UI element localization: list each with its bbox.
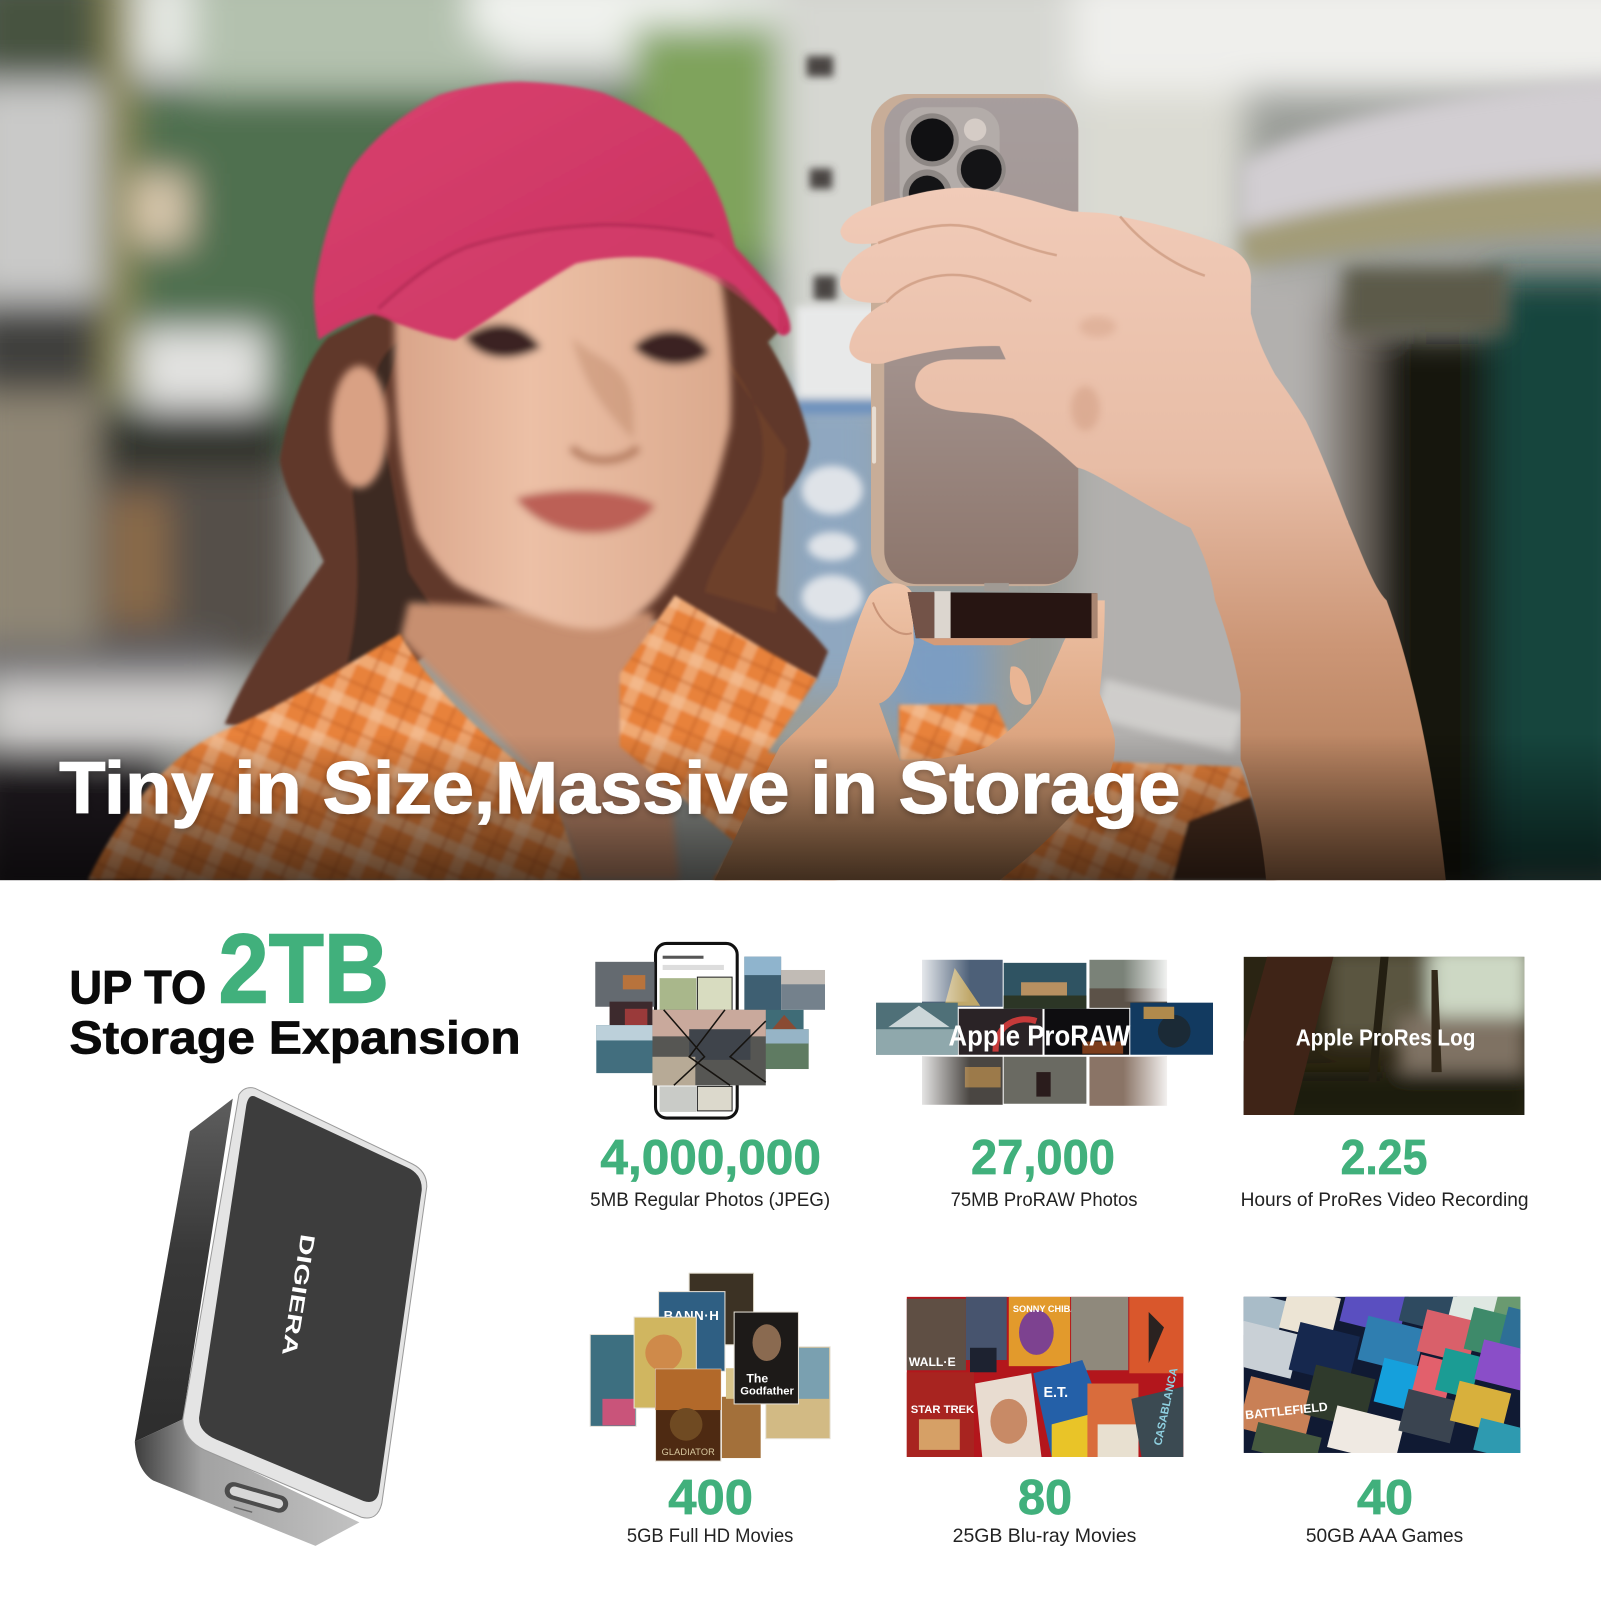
curved photo wall — [876, 955, 1213, 1108]
item: AAA games — [1244, 1296, 1520, 1542]
caption: 5GB Full HD Movies — [627, 1525, 793, 1547]
product: SSD device — [135, 1088, 427, 1546]
logo: DIGIERA — [277, 1233, 318, 1357]
overlay label: Apple ProRAW — [949, 1021, 1130, 1053]
item: JPEG photos — [590, 943, 830, 1211]
heading: capacity: UP TO — [69, 961, 206, 1014]
right sleeve behind arm — [899, 705, 1276, 880]
poster stack: The — [746, 1371, 768, 1385]
upper hand and arm holding phone — [840, 188, 1446, 880]
caption: 25GB Blu-ray Movies — [953, 1525, 1136, 1547]
bottom dark gradient — [0, 735, 1601, 880]
disc cover collage: SONNY CHIBA — [1013, 1304, 1077, 1314]
disc cover collage: CASABLANCA — [1152, 1367, 1181, 1447]
figure: 80 — [1018, 1471, 1072, 1525]
game tile collage — [1244, 1296, 1520, 1453]
heading: capacity: Storage Expansion — [69, 1012, 521, 1064]
blurred street background — [0, 0, 1601, 914]
photo collage with phone — [595, 943, 825, 1118]
figure: 4,000,000 — [600, 1131, 821, 1185]
game tile collage: BATTLEFIELD — [1245, 1400, 1328, 1422]
pink cap — [314, 82, 790, 340]
caption: 75MB ProRAW Photos — [951, 1189, 1137, 1211]
overlay label: Apple ProRes Log — [1296, 1025, 1475, 1051]
disc cover collage: STAR TREK — [911, 1404, 974, 1416]
woman's hair — [225, 250, 828, 735]
neck and chest — [400, 602, 679, 880]
disc cover collage: WALL·E — [909, 1355, 956, 1369]
woman's face — [331, 240, 731, 629]
USB-C port — [223, 1480, 290, 1515]
figure: 40 — [1357, 1471, 1413, 1525]
connector stem — [984, 583, 1009, 586]
figure: 27,000 — [971, 1131, 1115, 1185]
plaid shirt — [88, 595, 837, 880]
poster stack: BANN·H — [664, 1308, 719, 1323]
item: ProRes video — [1235, 944, 1532, 1211]
item: Full HD movies — [590, 1273, 830, 1547]
lower hand with thumb — [715, 583, 1115, 880]
forest still — [1244, 956, 1524, 1115]
poster stack — [590, 1273, 830, 1461]
item: Blu-ray movies — [907, 1297, 1183, 1547]
disc cover collage: E.T. — [1044, 1385, 1068, 1401]
figure: 400 — [668, 1471, 753, 1525]
smartphone — [871, 94, 1078, 591]
caption: Hours of ProRes Video Recording — [1241, 1189, 1529, 1211]
heading: capacity — [69, 914, 521, 1064]
poster stack: GLADIATOR — [662, 1447, 715, 1457]
poster stack: Godfather — [740, 1386, 794, 1398]
caption: 50GB AAA Games — [1306, 1525, 1463, 1547]
camera module — [900, 108, 1006, 198]
magnetic SSD attached to phone — [908, 591, 1098, 645]
heading: capacity: 2TB — [219, 914, 389, 1024]
caption: 5MB Regular Photos (JPEG) — [590, 1189, 830, 1211]
disc cover collage — [907, 1297, 1183, 1457]
hero photo panel — [0, 0, 1601, 914]
item: ProRAW photos — [876, 955, 1213, 1211]
figure: 2.25 — [1341, 1131, 1427, 1185]
hero title: Tiny in Size,Massive in Storage — [59, 746, 1180, 829]
